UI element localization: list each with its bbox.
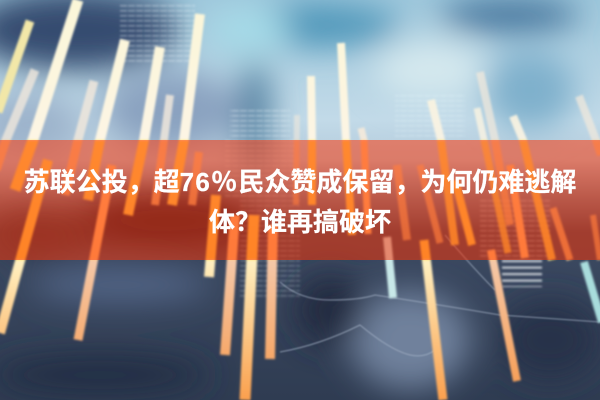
rising bars, upper and right [0, 0, 600, 260]
trend lines in lower right [280, 235, 600, 356]
title band [0, 140, 600, 260]
bars, lower left and lower right [0, 160, 600, 400]
title [24, 167, 576, 237]
data texture: dotted stripes [120, 5, 550, 300]
title: 体？谁再搞破坏 [209, 207, 391, 237]
title: 苏联公投，超76％民众赞成保留，为何仍难逃解 [24, 167, 576, 197]
